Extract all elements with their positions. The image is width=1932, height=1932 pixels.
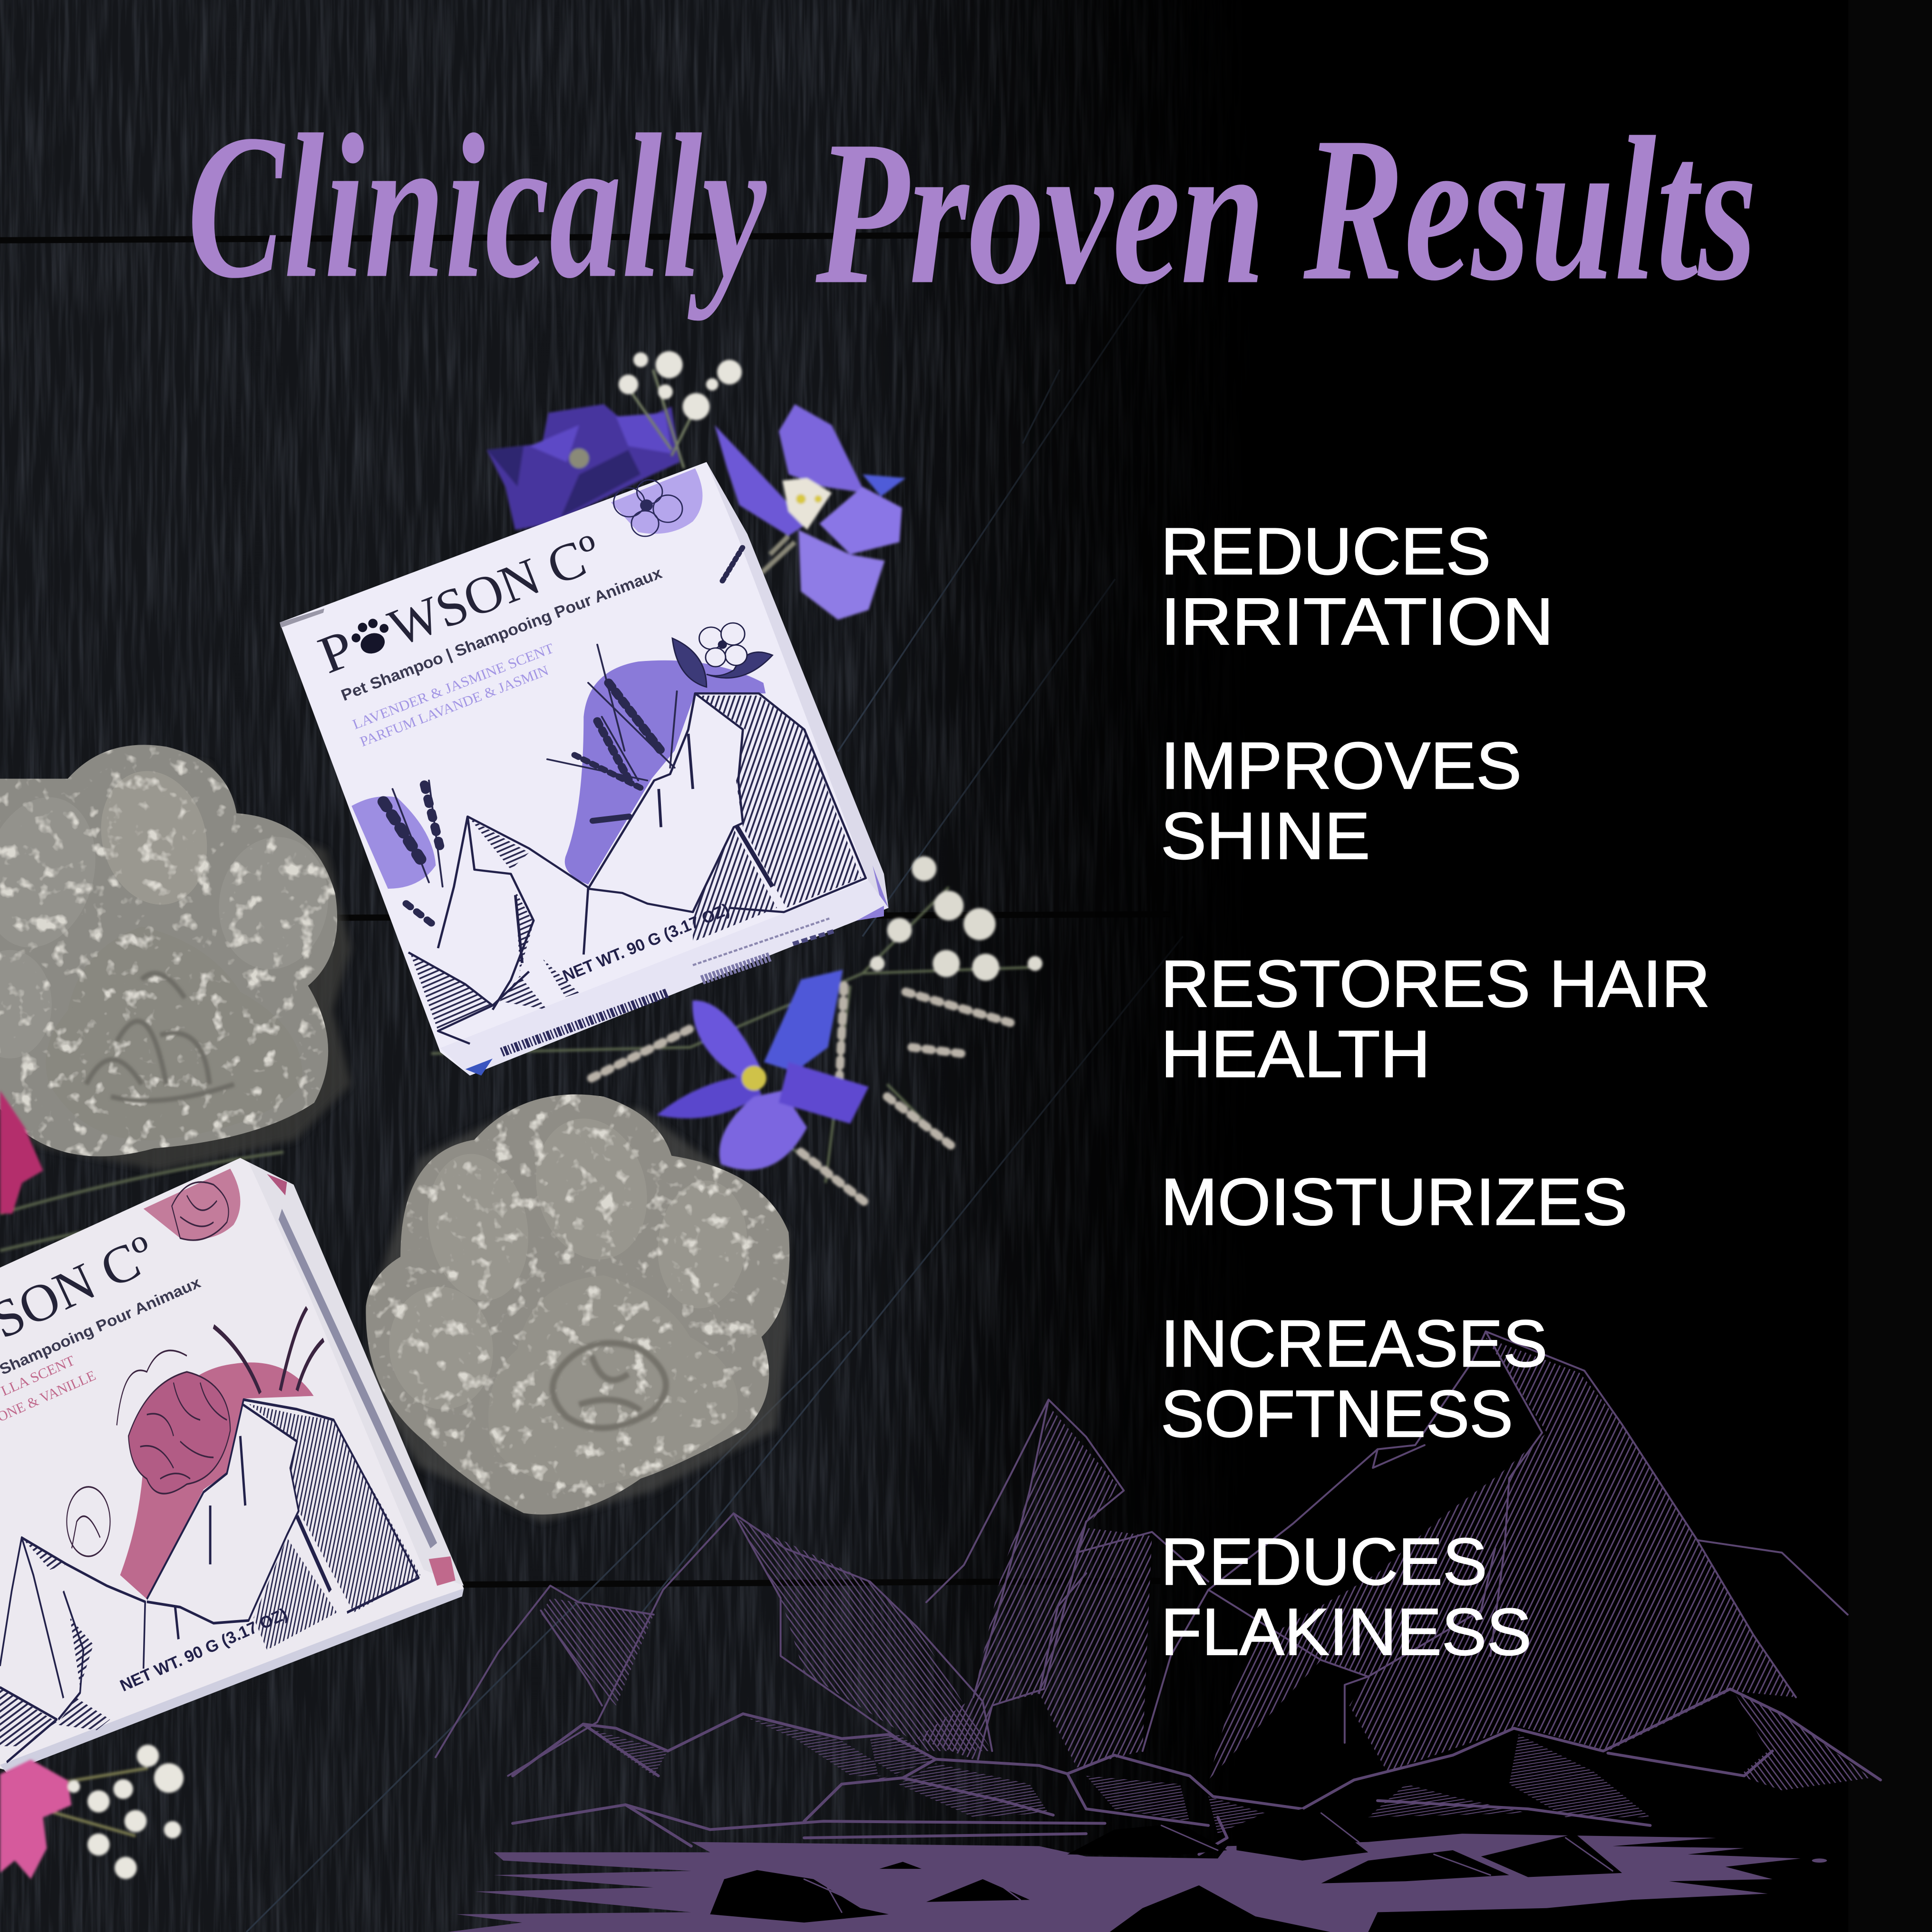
- mountain sketch: [411, 696, 861, 1031]
- benefit: reduces irritation: REDUCES: [1161, 514, 1491, 588]
- pink flower and white blossoms bottom left: [0, 1745, 184, 1879]
- scent lines: PARFUM LAVANDE & JASMIN: [358, 662, 551, 750]
- jasmine and leaves: [672, 623, 772, 687]
- benefit: reduces flakiness: REDUCES: [1161, 1524, 1487, 1599]
- illustration: purple line-art mountains and lake: [436, 1331, 1881, 1932]
- stems and pink flower behind lower box: [0, 1090, 283, 1251]
- benefit: increases softness: SOFTNESS: [1161, 1376, 1513, 1451]
- benefit: increases softness: [1161, 1306, 1548, 1451]
- net weight: NET WT. 90 G (3.17 OZ): [117, 1604, 290, 1695]
- barcode and small print: [502, 919, 834, 1052]
- brand wordmark: [311, 523, 609, 685]
- benefit: improves shine: [1161, 728, 1522, 873]
- foreground hills: [513, 1689, 1881, 1854]
- product box: lavender & jasmine: [280, 462, 889, 1076]
- title word: Results: Results: [1301, 95, 1757, 324]
- title word: Proven: Proven: [813, 98, 1265, 327]
- shampoo bar: upper paw: [0, 745, 351, 1171]
- benefit: reduces flakiness: FLAKINESS: [1161, 1594, 1532, 1669]
- white blossoms top: [619, 351, 742, 468]
- dark purple flower: [487, 404, 680, 530]
- benefit: reduces irritation: [1161, 514, 1554, 659]
- scent lines: LLA SCENT: [0, 1353, 77, 1399]
- shampoo bar: lower paw: [366, 1094, 789, 1522]
- lilac shapes: [611, 468, 702, 534]
- lake: [447, 1834, 1801, 1932]
- flowers and blossoms right of box: [431, 856, 1042, 1205]
- scent lines: LAVENDER & JASMINE SCENT: [350, 641, 556, 733]
- light purple flower: [715, 404, 906, 620]
- benefit: restores hair health: [1161, 946, 1710, 1091]
- box body: [280, 462, 889, 1076]
- title word: Clinically: Clinically: [187, 92, 768, 321]
- benefit: improves shine: SHINE: [1161, 798, 1370, 873]
- benefit: reduces flakiness: [1161, 1524, 1532, 1669]
- purple lower flower: [657, 970, 869, 1170]
- benefits list: [1161, 514, 1710, 1669]
- box body: [0, 1158, 464, 1770]
- benefit: improves shine: IMPROVES: [1161, 728, 1522, 803]
- lavender sprigs: [383, 547, 743, 925]
- product box: peony & vanilla: [0, 1158, 464, 1773]
- mountain outlines: [436, 1331, 1848, 1776]
- flower sketch: [614, 480, 682, 536]
- brand wordmark: WSON Cº: [381, 523, 609, 658]
- far mountains hatching: [541, 1338, 1871, 1834]
- flowers behind box: [487, 351, 906, 620]
- benefit: increases softness: INCREASES: [1161, 1306, 1548, 1381]
- lake rocks: [710, 1809, 1827, 1932]
- peony sketch: [67, 1182, 324, 1556]
- benefit: restores hair health: RESTORES HAIR: [1161, 946, 1710, 1021]
- product line: Shampooing Pour Animaux: [0, 1274, 203, 1378]
- title: [187, 92, 1757, 327]
- mountain sketch: [0, 1404, 420, 1746]
- benefit: restores hair health: HEALTH: [1161, 1017, 1430, 1091]
- brand wordmark: P: [311, 619, 362, 685]
- benefit: moisturizes: MOISTURIZES: [1161, 1165, 1628, 1239]
- benefit: reduces irritation: IRRITATION: [1161, 584, 1554, 659]
- rose shapes: [144, 1169, 240, 1239]
- product line: Pet Shampoo | Shampooing Pour Animaux: [339, 564, 665, 705]
- net weight: NET WT. 90 G (3.17 OZ): [560, 900, 732, 986]
